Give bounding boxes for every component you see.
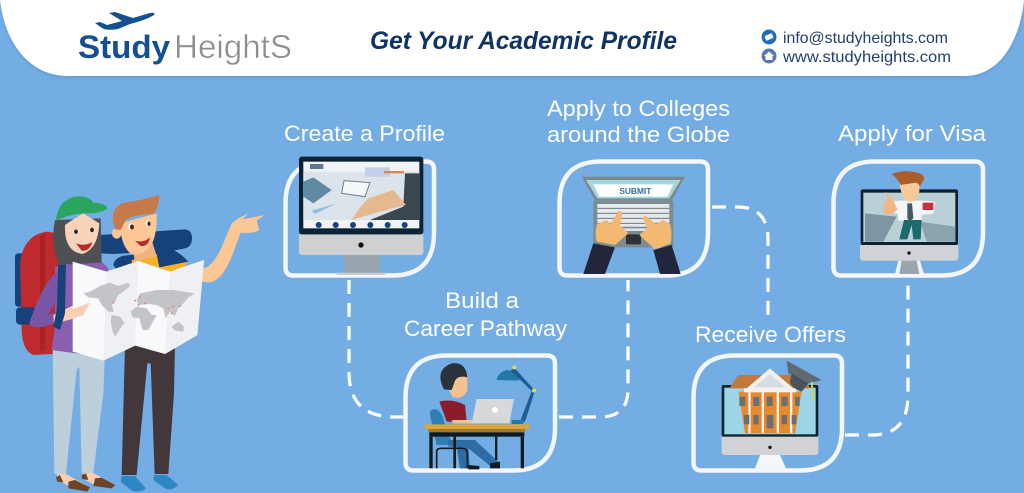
card frame [834, 162, 983, 276]
card frame [406, 356, 555, 470]
step 2 label: Build a [445, 288, 520, 313]
dashed connector: offers to visa [845, 280, 908, 435]
step 3 panel: apply to colleges [560, 162, 708, 276]
man: shoes [121, 475, 178, 492]
man: legs [122, 345, 175, 475]
dashed connector: pathway to colleges [559, 280, 628, 417]
woman: arm [29, 270, 90, 327]
card frame [694, 356, 842, 470]
header band [0, 0, 1024, 76]
continents [83, 283, 195, 337]
icon: monitor with businessman [860, 171, 958, 274]
logo word: Heights: HeightS [174, 28, 292, 65]
step 5 label: Apply for Visa [838, 121, 987, 146]
woman: hand on map [67, 303, 90, 320]
man: torso [113, 243, 188, 280]
icon: student at desk [424, 363, 536, 469]
step 2 label: Career Pathway [404, 316, 567, 341]
step 3 label [547, 96, 730, 147]
step 2 panel: build a career pathway [406, 356, 555, 470]
step 4 panel: receive offers [694, 356, 842, 470]
contact details [762, 30, 951, 66]
illustration: two travellers with map [15, 195, 265, 492]
map markers [112, 296, 181, 314]
icon: monitor with university [722, 361, 822, 468]
submit button text: SUBMIT [619, 187, 651, 196]
man: pointing arm [202, 213, 265, 283]
step 3 label: Apply to Colleges [547, 96, 730, 121]
world map [73, 260, 204, 361]
step 4 label: Receive Offers [695, 322, 846, 347]
bedroll [100, 229, 192, 254]
woman: head [53, 196, 107, 265]
step 1 label: Create a Profile [284, 121, 445, 146]
man: head [112, 195, 159, 262]
backpack strap [53, 263, 66, 330]
card frame [286, 162, 434, 276]
step 5 panel: apply for visa [834, 162, 983, 276]
logo word: Study: Study [78, 29, 170, 65]
icon: airplane [95, 12, 154, 30]
woman: feet and sandals [56, 473, 115, 492]
title: Get Your Academic Profile [370, 27, 677, 55]
woman: legs [53, 348, 105, 474]
step 3 label: around the Globe [547, 122, 730, 147]
logo: StudyHeights [78, 12, 292, 65]
icon: monitor with website [299, 157, 423, 275]
step 2 label [404, 288, 567, 341]
website address: www.studyheights.com [782, 49, 951, 66]
dashed connector: colleges to offers [712, 207, 768, 322]
email address: info@studyheights.com [783, 30, 948, 47]
woman: torso [52, 260, 108, 357]
icon: home [762, 48, 776, 64]
card frame [560, 162, 708, 276]
step 1 panel: create a profile [286, 157, 434, 276]
icon: laptop with submit [582, 177, 685, 274]
dashed connector: profile to pathway [349, 280, 403, 417]
backpack [15, 232, 63, 355]
icon: email [762, 30, 776, 44]
